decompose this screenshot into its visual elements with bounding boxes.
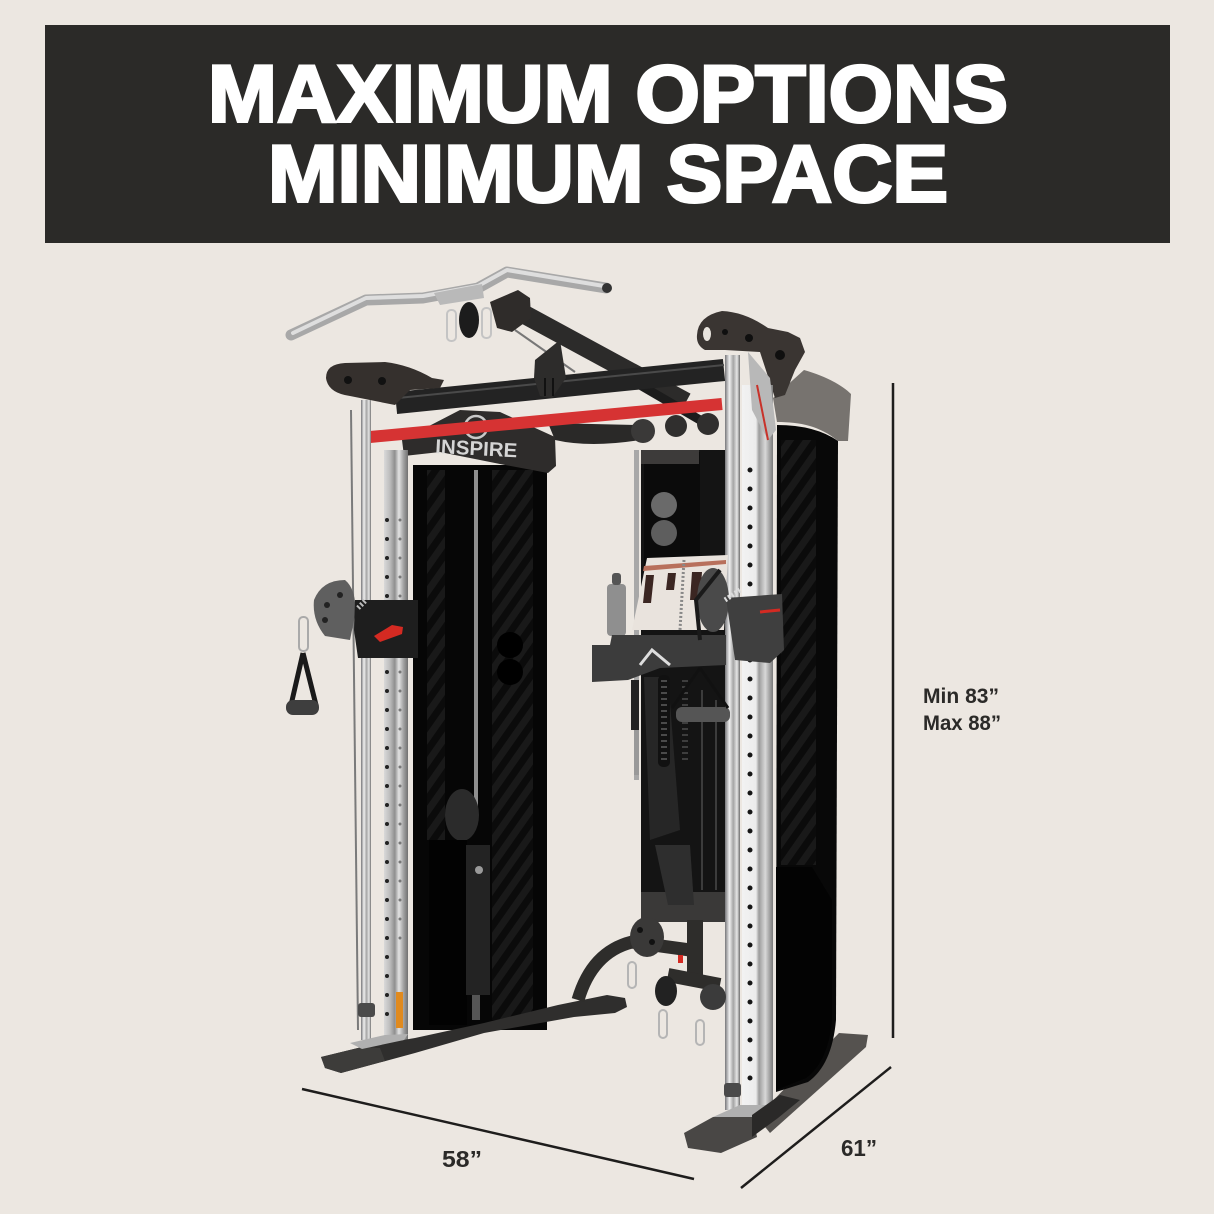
right top pulley plate	[697, 311, 805, 398]
bottle	[607, 573, 626, 636]
title line 2: MINIMUM SPACE	[268, 130, 948, 220]
grip bar	[676, 707, 730, 722]
lat pulldown bar	[291, 270, 612, 335]
title banner	[45, 25, 1170, 243]
ankle strap	[644, 677, 680, 840]
lower pulley cluster	[628, 917, 726, 1045]
hanging accessories	[631, 650, 730, 840]
red pull-up bar	[370, 404, 722, 437]
workout book	[632, 555, 728, 630]
width dimension line	[302, 1089, 694, 1179]
logo ring	[465, 416, 487, 438]
brand name: INSPIRE	[435, 436, 518, 462]
left chrome column	[361, 400, 371, 1040]
storage tray with book and bottle	[592, 555, 728, 682]
height dimension line	[892, 383, 894, 1038]
right tower shroud	[773, 370, 851, 441]
left cable	[351, 410, 358, 1030]
left weight tower	[413, 465, 547, 1030]
right side pulley and bracket	[696, 568, 784, 663]
top pulley with carabiners	[434, 284, 531, 341]
curved arm	[578, 942, 690, 1000]
width label: 58”	[442, 1146, 482, 1172]
left tower shroud with logo	[402, 410, 556, 473]
left top pulley plate	[326, 362, 444, 405]
height label: Max 88”	[923, 712, 1001, 735]
gym machine illustration	[286, 270, 868, 1153]
depth dimension line	[741, 1067, 891, 1188]
right column front chrome	[725, 355, 740, 1110]
red adjuster knob	[374, 625, 403, 642]
central weight stack frame	[634, 450, 729, 922]
warning label	[396, 992, 403, 1028]
D-handle attachment	[286, 617, 319, 715]
right rack	[742, 352, 776, 1110]
height label: Min 83”	[923, 685, 999, 708]
depth label: 61”	[841, 1135, 877, 1161]
hanging pulley on crossbar	[534, 340, 566, 398]
top crossbar, black	[396, 365, 724, 403]
left side pulley and adjuster	[314, 580, 418, 658]
right front foot	[684, 1095, 800, 1153]
tray	[592, 635, 726, 682]
left perforated rack	[384, 450, 408, 1040]
right base plate	[757, 1033, 868, 1133]
rear diagonal beam	[515, 312, 700, 420]
height label	[923, 685, 1001, 735]
arc beneath top bar with pulleys	[548, 413, 719, 444]
column collars	[358, 1003, 741, 1097]
left base frame	[321, 995, 627, 1073]
title line 1: MAXIMUM OPTIONS	[208, 50, 1008, 140]
top hinge plate	[748, 352, 776, 440]
V-handle	[640, 650, 670, 665]
right weight tower	[776, 425, 838, 1092]
ropes	[658, 675, 670, 767]
